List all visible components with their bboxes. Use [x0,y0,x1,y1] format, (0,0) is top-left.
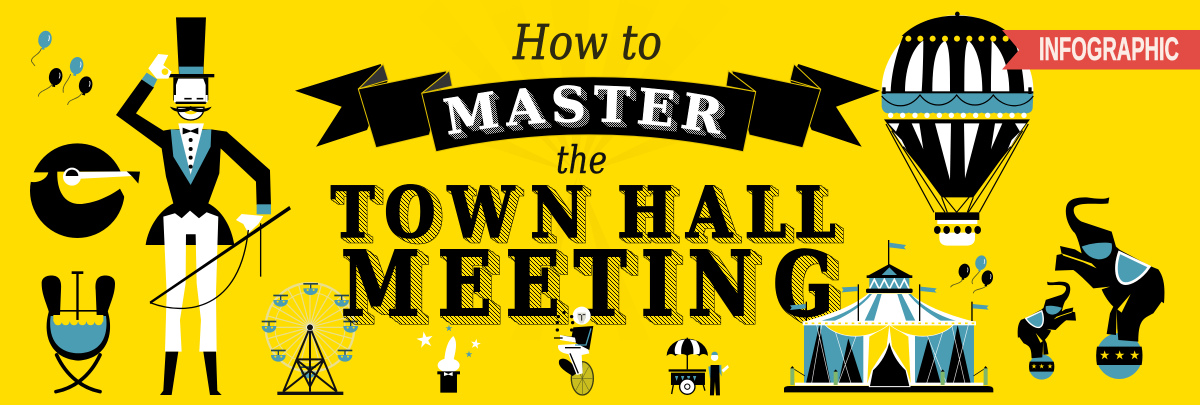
rabbit in hat [415,325,482,393]
umbrella [667,338,708,369]
unicyclist juggler [554,307,593,395]
centre band [422,77,756,152]
legs [558,343,589,376]
elephant small on ball [1018,282,1076,380]
top hat [167,17,214,77]
whip [150,206,291,308]
sunburst rays [340,0,810,340]
gondola basket [934,212,981,246]
head [170,77,212,120]
flags and poles [790,243,989,321]
right tail fold [790,64,821,89]
left tail fold [358,64,388,89]
striped roof [803,293,976,325]
hot air balloon [882,12,1033,246]
balloons top left [31,29,94,105]
elephant large on ball [1055,197,1164,379]
bird emblem [27,143,147,238]
tower [277,324,343,395]
unicycle wheel [571,362,593,395]
ringmaster jacket [116,79,271,245]
ferris wheel [262,282,358,395]
entrance curtain [825,325,953,387]
title: town hall: TOWN HALL [330,172,836,254]
cart body [669,369,706,394]
right tail [790,64,880,147]
title: the: the [556,138,607,182]
title: meeting: MEETING [341,232,834,337]
vendor [708,352,729,395]
boots [160,352,222,395]
cupola [866,240,913,293]
head [573,307,591,325]
ribbon banner [295,64,880,152]
left panel fold [422,71,452,93]
left tail [295,64,388,147]
upper envelope [882,12,1033,93]
balloons by tent [951,254,994,293]
right panel fold [726,71,756,92]
title: master: MASTER [443,85,726,140]
bead row [883,113,1032,118]
teal lapels [171,129,211,185]
trousers [163,211,218,352]
right cuff and glove [236,204,271,233]
raised hand [142,54,172,87]
torso [554,326,593,350]
ice cream cart and vendor [667,338,729,395]
teal band [882,87,1033,113]
wheel rim and spokes [265,282,355,372]
striped lamp posts [790,366,988,385]
shirt with bow tie [178,123,204,175]
right panel [732,71,821,148]
title: how to: How to [512,15,662,71]
juggling balls [556,311,574,332]
ropes [886,124,1028,212]
circus tent [784,240,993,392]
gondolas [262,283,358,378]
tent walls [795,325,983,386]
platform [784,386,993,392]
left panel [358,71,447,148]
ringmaster figure [116,17,291,395]
lower envelope [884,119,1030,197]
folding chair with paddles [42,271,115,392]
